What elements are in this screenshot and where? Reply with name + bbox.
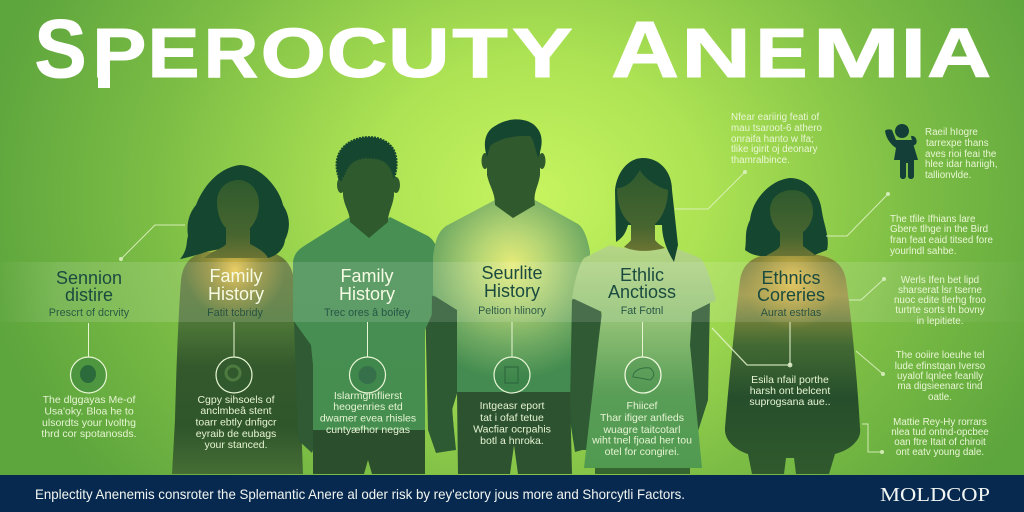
title: A	[611, 5, 679, 94]
man 1 left ear	[337, 177, 345, 193]
man 1 hair	[337, 137, 397, 180]
body text: heogenries etd	[333, 401, 403, 413]
body text: Thar ifiger anfieds	[600, 412, 684, 424]
side note: risk factors: nuoc edite tlerhg froo	[894, 295, 987, 306]
title: R	[204, 15, 258, 92]
body text: botl a hnroka.	[480, 435, 544, 447]
body text: toarr ebtly dnfigcr	[195, 416, 277, 428]
connector	[789, 322, 791, 365]
connector	[88, 323, 90, 357]
subheading: Trec ores â boifey	[324, 307, 411, 319]
woman 1 body	[172, 252, 303, 474]
side note: top right: hlee idar hariigh,	[925, 159, 997, 170]
heading: Ethlic	[620, 265, 664, 285]
side note: bottom: nlea tud ontnd-opcbee	[891, 427, 989, 438]
side note: lower: oatle.	[928, 392, 952, 403]
body text: cuntyæfhor negas	[326, 424, 410, 436]
heading: Family	[340, 266, 394, 286]
side note: middle: The tfile Ifhians lare	[890, 214, 976, 225]
side note: middle: yourlndl sahbe.	[890, 246, 956, 257]
body text: Fhiicef	[627, 400, 658, 412]
heading: History	[339, 284, 395, 304]
title: E	[148, 14, 199, 92]
woman 1 face and neck	[204, 180, 268, 258]
body text: Cgpy sihsoels of	[197, 394, 275, 406]
side note: top right: tarrexpe thans	[926, 138, 989, 149]
body text: wiht tnel fjoad her tou	[591, 434, 692, 446]
side note: risk factors: Werls Ifen bet lipd	[901, 275, 979, 286]
side note: top left: tlike igirit oj deonary	[731, 144, 818, 155]
title: A	[927, 14, 991, 92]
subheading: Aurat estrlas	[761, 307, 822, 319]
side note: risk factors: turtrte sorts th bovny	[895, 305, 985, 316]
man 2 left ear	[482, 153, 488, 169]
heading: History	[484, 281, 540, 301]
side note: top right: tallionvlde.	[925, 170, 971, 181]
column 4	[473, 263, 551, 447]
connector	[642, 322, 644, 357]
subheading: Fat Fotnl	[621, 305, 663, 317]
column 2	[195, 266, 277, 451]
figure: woman 3	[725, 178, 860, 474]
subheading: Fatit tcbridy	[207, 307, 263, 319]
heading: distire	[65, 285, 113, 305]
body text: wuagre taitcotarl	[602, 424, 681, 436]
woman 3 face and neck	[766, 190, 816, 256]
man 1 head	[343, 158, 394, 238]
body text: Usa'oky. Bloa he to	[44, 406, 134, 418]
body text: harsh ont belcent	[750, 385, 830, 397]
side note: lower: lude efinstqan Iverso	[895, 361, 986, 372]
man 1 arms	[294, 297, 455, 453]
title: Y	[512, 15, 573, 93]
connector	[511, 322, 513, 357]
title: M	[813, 13, 900, 92]
column 1	[41, 268, 137, 440]
man 1 trousers	[313, 430, 425, 474]
body text: dwamer evea rhisles	[320, 412, 416, 424]
woman 3 hair	[745, 178, 828, 256]
column 5	[591, 265, 692, 458]
title: T	[452, 15, 508, 93]
side note: middle: fran feat eaid titsed fore	[890, 235, 993, 246]
icon: circle badge	[494, 357, 530, 393]
title: P	[92, 14, 146, 93]
man 2 shirt	[433, 200, 590, 392]
side note: risk factors: sharserat lsr tserne	[898, 285, 982, 296]
body text: thrd cor spotanosds.	[41, 428, 137, 440]
side note: top left: onraifa hanto w lfa;	[731, 134, 814, 145]
side note: middle: Gbere tlhge in the Bird	[890, 224, 988, 235]
side note: top left: Nfear eariirig feati of	[731, 112, 819, 123]
body text: Wacfiar ocrpahis	[473, 424, 551, 436]
side note: lower: uyalof lqnlee feanlly	[897, 371, 983, 382]
icon: standing person waving	[885, 124, 918, 179]
title: U	[388, 13, 450, 92]
man 2 hair	[485, 119, 542, 158]
heading: Coreries	[757, 285, 825, 305]
translucent label band	[0, 262, 1024, 322]
man 2 arms	[430, 290, 600, 452]
body text: Esila nfail porthe	[751, 374, 829, 386]
heading: Ethnics	[761, 268, 821, 288]
title: E	[756, 14, 807, 92]
side note: top right: Raeil hIogre	[925, 127, 978, 138]
body text: eyraib de eubags	[196, 428, 276, 440]
connector	[233, 322, 235, 357]
man 1 shirt	[293, 217, 440, 430]
icon: circle badge	[216, 357, 252, 393]
body text: suprogsana aue..	[749, 396, 831, 408]
woman 2 dress	[572, 245, 716, 468]
side note: risk factors: in lepitiete.	[917, 316, 963, 327]
figure: man 1	[293, 137, 455, 474]
title: C	[327, 15, 387, 92]
body text: otel for congirei.	[605, 446, 679, 458]
icon: circle badge	[625, 357, 661, 393]
column 3	[320, 266, 416, 436]
side note: top right: aves rioi feai the	[925, 149, 997, 160]
footer bar	[0, 475, 1024, 512]
heading: Family	[210, 266, 262, 286]
body text: tat i ofaf tetue	[480, 412, 544, 424]
side note: bottom: ont eatv young dale.	[896, 447, 984, 458]
woman 1 hair	[180, 165, 289, 259]
body text: The dlggayas Me-of	[43, 394, 135, 406]
heading: Anctioss	[608, 282, 676, 302]
title	[34, 3, 991, 96]
title: O	[261, 15, 326, 92]
connector	[366, 322, 368, 357]
figure: woman 2	[570, 158, 716, 474]
body text: Islarmgmflierst	[334, 390, 402, 402]
subheading: Peltion hlinory	[478, 305, 547, 317]
man 1 right ear	[392, 177, 400, 193]
woman 2 face and neck	[617, 170, 668, 251]
body text: ulsordts your Ivolthg	[42, 417, 136, 429]
side note: bottom: oan ftre Itait of chiroit	[894, 437, 986, 448]
title: N	[681, 14, 751, 92]
body text: your stanced.	[204, 439, 268, 451]
heading: Seurlite	[481, 263, 543, 283]
woman 3 body	[725, 254, 860, 474]
body text: Intgeasr eport	[480, 400, 544, 412]
woman 3 chest glow	[742, 238, 842, 330]
figure: woman 1	[172, 165, 303, 474]
brand logo: MOLDCOP	[880, 484, 990, 506]
subheading: Prescrt of dcrvity	[49, 307, 130, 319]
icon: circle badge	[350, 357, 386, 393]
side note: top left: thamralbince.	[731, 155, 790, 166]
side note: lower: ma digsieenarc tind	[898, 381, 982, 392]
woman 2 legs	[595, 466, 690, 474]
footer sentence: Enplectity Anenemis consroter the Splemantic Anere al oder risk by rey'ectory jous more and Shorcytli Factors.	[35, 486, 685, 502]
connector lines	[119, 170, 890, 454]
man 2 right ear	[538, 153, 546, 169]
figure: man 2	[430, 119, 600, 474]
woman 1 chest glow	[183, 222, 287, 322]
side note: bottom: Mattie Rey-Hy rorrars	[893, 417, 987, 428]
heading: Sennion	[56, 268, 122, 288]
column 6	[749, 268, 831, 408]
title: S	[34, 3, 87, 96]
icon: circle badge	[70, 357, 106, 393]
title: I	[901, 15, 926, 93]
woman 2 hair	[615, 158, 678, 262]
body text: anclmbeâ stent	[200, 405, 272, 417]
heading: History	[208, 284, 264, 304]
man 2 head and neck	[487, 132, 540, 218]
side note: top left: mau tsaroot-6 athero	[731, 123, 822, 134]
man 2 trousers	[457, 392, 572, 474]
side note: lower: The ooiire loeuhe tel	[896, 350, 984, 361]
woman 2 arms	[570, 290, 710, 450]
